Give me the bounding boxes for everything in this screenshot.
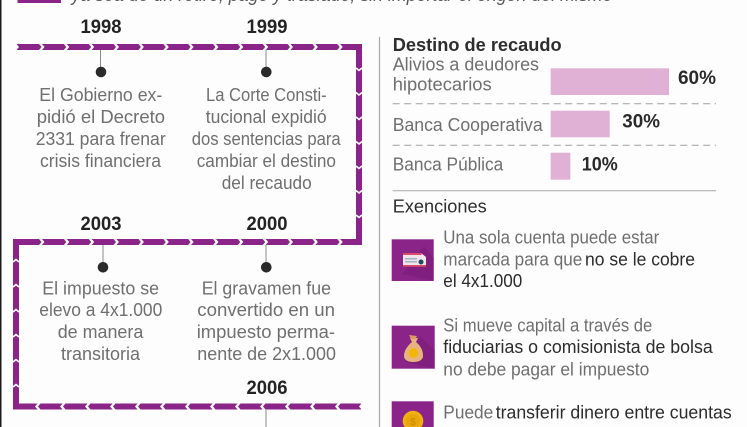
timeline event: 1998: crisis financiera xyxy=(40,150,162,171)
exemption: marked account: marcada para que xyxy=(443,248,582,269)
timeline event: 2000: convertido en un xyxy=(197,299,335,320)
bar row: alivios a deudores hipotecarios: 60% xyxy=(678,68,716,89)
timeline event: 1998 xyxy=(36,17,166,171)
timeline event: 1998: El Gobierno ex- xyxy=(39,84,162,105)
header: cropped intro strip xyxy=(18,0,612,6)
bar row: alivios a deudores hipotecarios xyxy=(393,54,716,95)
heading: destino de recaudo: Destino de recaudo xyxy=(393,34,562,55)
timeline event: 2000: El gravamen fue xyxy=(202,278,331,298)
bar row: alivios a deudores hipotecarios: Alivios a deudores xyxy=(393,54,539,75)
timeline event: 2000: nente de 2x1.000 xyxy=(197,343,336,364)
exemption: marked account: el 4x1.000 xyxy=(443,270,522,291)
timeline event: 1998: 1998 xyxy=(80,17,122,38)
bar row: banca publica: 10% xyxy=(582,155,618,176)
timeline event: 1999: 1999 xyxy=(246,17,288,38)
bar row: banca cooperativa xyxy=(393,111,660,137)
timeline event: 2006 xyxy=(246,378,288,427)
bar row: banca cooperativa: 30% xyxy=(622,111,660,132)
timeline event: 2006: 2006 xyxy=(246,378,288,399)
timeline event: 1999: dos sentencias para xyxy=(192,128,341,149)
timeline event: 2003: El impuesto se xyxy=(42,278,159,298)
bar row: banca cooperativa: Banca Cooperativa xyxy=(393,114,543,135)
timeline event: 1999: tucional expidió xyxy=(206,106,327,127)
timeline event: 2000: impuesto perma- xyxy=(197,321,335,342)
exemption: marked account xyxy=(392,227,695,291)
heading: exenciones: Exenciones xyxy=(393,196,487,217)
exemption: transfers xyxy=(392,401,732,427)
timeline event: 1999: cambiar el destino xyxy=(197,150,336,171)
timeline event: 1998: pidió el Decreto xyxy=(37,106,165,127)
timeline event: 2000: 2000 xyxy=(246,214,288,235)
exemption: fiduciaries: Si mueve capital a través de xyxy=(443,314,652,335)
timeline event: 1998: 2331 para frenar xyxy=(36,128,166,149)
timeline path xyxy=(13,43,364,411)
timeline event: 1999: La Corte Consti- xyxy=(206,84,327,105)
timeline event: 2000 xyxy=(197,214,336,364)
timeline event: 2003: de manera xyxy=(58,321,144,342)
icon: check card xyxy=(392,239,434,281)
timeline event: 1999 xyxy=(192,17,341,193)
timeline event: 1999: del recaudo xyxy=(222,172,312,193)
icon: money bag xyxy=(392,326,435,369)
timeline event: 2003: elevo a 4x1.000 xyxy=(39,299,162,320)
timeline event: 2003: 2003 xyxy=(80,214,122,235)
bar row: banca publica: Banca Pública xyxy=(393,154,504,175)
panel divider xyxy=(378,37,380,427)
panel: destino de recaudo xyxy=(393,34,716,180)
exemption: fiduciaries: no debe pagar el impuesto xyxy=(443,358,649,379)
exemption: transfers: transferir dinero entre cuentas xyxy=(496,402,732,423)
exemption: transfers: Puede xyxy=(443,402,493,423)
timeline event: 2003 xyxy=(39,214,162,364)
timeline event: 2003: transitoria xyxy=(61,343,141,364)
bar row: alivios a deudores hipotecarios: hipotecarios xyxy=(393,74,492,95)
header purple block xyxy=(18,0,61,3)
bar row: banca publica xyxy=(393,153,618,180)
exemption: marked account: Una sola cuenta puede estar xyxy=(443,227,659,248)
exemption: marked account: no se le cobre xyxy=(585,248,695,269)
panel: exenciones xyxy=(392,196,732,427)
icon: coin xyxy=(392,401,434,427)
exemption: fiduciaries xyxy=(392,314,713,379)
exemption: fiduciaries: fiduciarias o comisionista de bolsa xyxy=(443,336,713,357)
